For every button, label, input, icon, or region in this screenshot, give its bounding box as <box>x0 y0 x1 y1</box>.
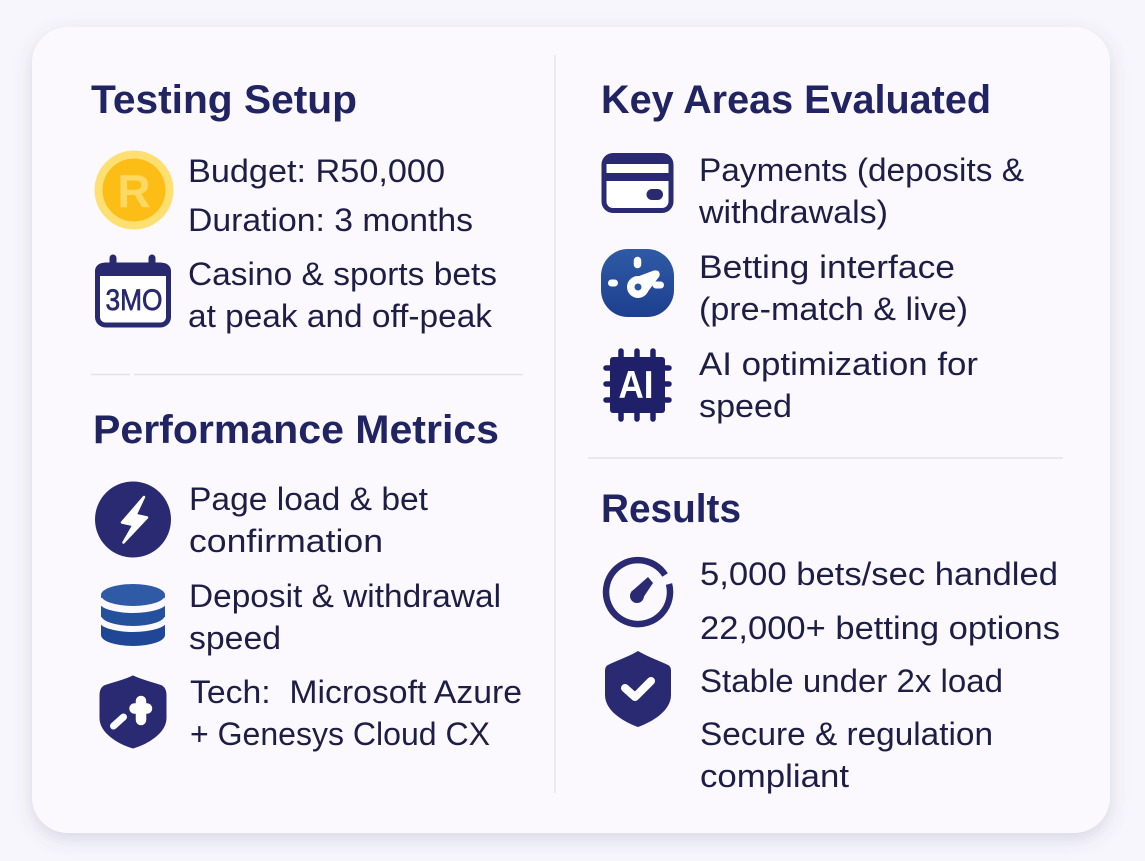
text: bets per second: 5,000 bets/sec handled <box>700 556 1058 592</box>
icon: rand coin <box>94 150 174 230</box>
text: speed: speed <box>189 620 281 656</box>
heading: Results: Results <box>601 487 741 531</box>
text: budget: Budget: R50,000 <box>188 153 445 189</box>
heading: Performance Metrics: Performance Metrics <box>93 408 499 452</box>
text: page load: Page load & bet <box>189 481 428 517</box>
text: duration: Duration: 3 months <box>188 202 473 238</box>
icon: AI chip: AI <box>618 364 654 407</box>
icon: calendar 3MO: 3MO <box>106 284 162 317</box>
icon: betting interface gauge <box>601 249 674 317</box>
text: stable under load: Stable under 2x load <box>700 663 1003 699</box>
icon: shield check <box>605 651 671 727</box>
icon: lightning bolt <box>95 482 171 558</box>
text: peak and off-peak: at peak and off-peak <box>188 298 493 334</box>
text: betting interface: Betting interface <box>699 249 955 285</box>
icon: payment card <box>603 154 672 210</box>
text: tech azure: Tech: Microsoft Azure <box>190 674 522 710</box>
text: genesys: + Genesys Cloud CX <box>190 716 490 752</box>
icon: calendar 3MO <box>95 258 171 325</box>
text: payments: Payments (deposits & <box>699 152 1024 188</box>
icon: shield plus <box>100 676 166 748</box>
text: casino and sports bets: Casino & sports bets <box>188 256 497 292</box>
icon: rand coin: R <box>117 165 151 217</box>
text: secure and regulation: Secure & regulation <box>700 716 993 752</box>
heading: Testing Setup: Testing Setup <box>91 78 357 122</box>
text: for speed: speed <box>699 388 792 424</box>
text: AI optimization: AI optimization for <box>699 346 978 382</box>
text: withdrawals: withdrawals) <box>698 194 888 230</box>
text: deposit and withdrawal: Deposit & withdrawal <box>189 578 501 614</box>
heading: Key Areas Evaluated: Key Areas Evaluated <box>601 78 991 122</box>
icon: AI chip <box>606 351 669 419</box>
text: confirmation: confirmation <box>189 523 383 559</box>
text: betting options: 22,000+ betting options <box>700 610 1060 646</box>
text: compliant: compliant <box>700 758 849 794</box>
icon: database <box>99 584 167 646</box>
icon: speedometer <box>606 560 670 624</box>
text: pre-match and live: (pre-match & live) <box>699 291 968 327</box>
